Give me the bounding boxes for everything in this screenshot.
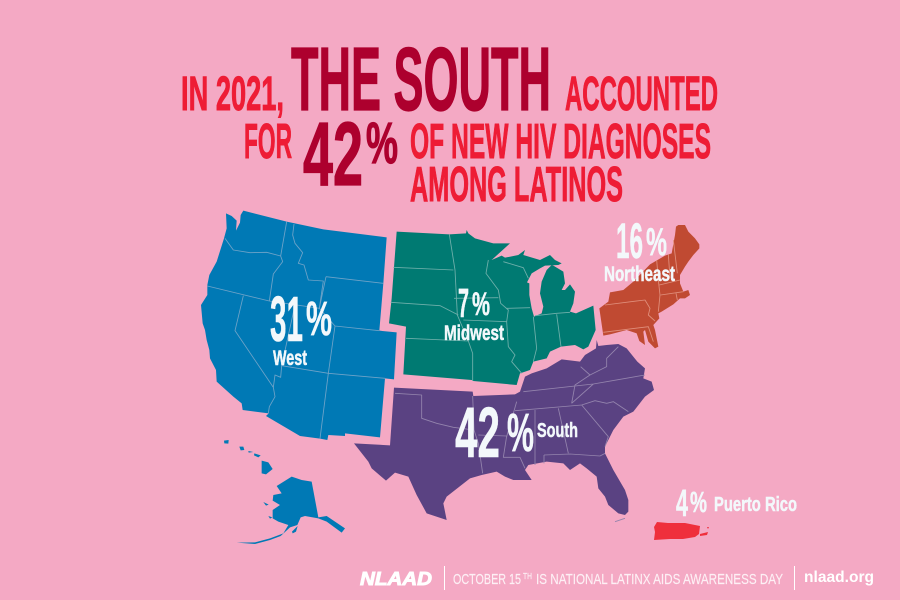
title: 42 <box>303 105 363 205</box>
title <box>181 30 718 212</box>
label: Puerto Rico 4%: 4 <box>676 483 688 525</box>
label: Puerto Rico 4% <box>676 483 797 525</box>
label: Midwest 7%: 7 <box>458 280 469 326</box>
label: South 42%: South <box>537 420 578 442</box>
label: South 42%: 42 <box>455 394 500 473</box>
map region: Puerto Rico <box>654 522 709 540</box>
label: Puerto Rico 4%: % <box>690 487 707 519</box>
map region: Northeast <box>599 225 699 348</box>
map region: Midwest <box>389 230 596 385</box>
label: Northeast 16%: 16 <box>616 213 643 269</box>
label: Northeast 16% <box>604 213 675 286</box>
label: Midwest 7%: % <box>472 286 490 322</box>
tagline: OCTOBER 15 <box>453 571 521 588</box>
logo: NLAAD: NLAAD <box>360 569 432 589</box>
tagline <box>453 571 783 588</box>
label: South 42% <box>455 394 578 473</box>
label: West 31%: % <box>306 293 332 346</box>
label: Northeast 16%: % <box>646 221 667 264</box>
map region: South <box>354 340 654 522</box>
label: Northeast 16%: Northeast <box>604 263 675 286</box>
label: South 42%: % <box>507 403 534 463</box>
text: ACCOUNTED <box>565 68 718 121</box>
label: Midwest 7%: Midwest <box>444 322 504 345</box>
tagline: IS NATIONAL LATINX AIDS AWARENESS DAY <box>536 571 783 588</box>
title: THE SOUTH <box>291 30 551 130</box>
label: West 31%: 31 <box>270 283 303 355</box>
title: FOR <box>244 115 292 169</box>
map region: West <box>201 211 397 440</box>
label: West 31%: West <box>273 347 307 370</box>
label: Puerto Rico 4%: Puerto Rico <box>714 494 797 516</box>
tagline: TH <box>523 572 532 581</box>
footer <box>360 566 874 590</box>
website: nlaad.org <box>804 569 874 586</box>
label: Midwest 7% <box>444 280 504 345</box>
map region: Alaska and Hawaii <box>224 440 345 544</box>
title: AMONG LATINOS <box>410 158 623 212</box>
title: IN 2021, <box>181 68 284 121</box>
title: % <box>366 111 398 176</box>
